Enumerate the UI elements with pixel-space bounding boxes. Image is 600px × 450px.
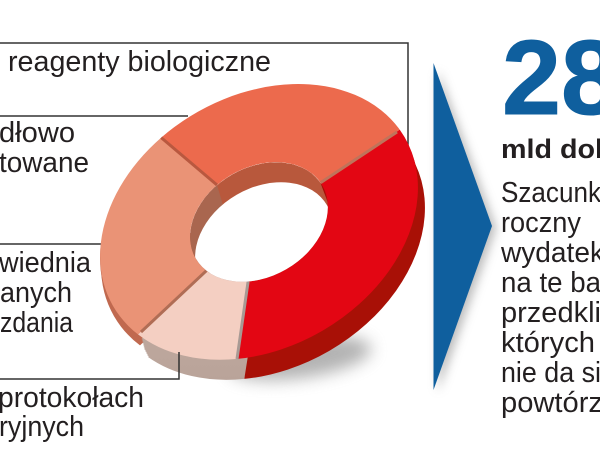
slice: orange [161,84,400,185]
label: third category: anych [0,277,72,309]
donut extruded side [100,132,425,380]
slice: peach [100,138,217,334]
arrow shadow [438,70,496,392]
label: fourth category: protokołach [0,382,144,414]
slice: pale pink [138,271,248,360]
label: fourth category: ryjnych [0,411,84,443]
slice: red largest [237,130,418,359]
unit label: mld dol [501,134,600,164]
description text: których [501,327,595,359]
connector lines: leaders behind the donut [0,43,408,244]
arrow pointing right [434,63,496,392]
description text: przedkli [501,297,600,329]
label: second category: dłowo [0,117,75,149]
label: third category [0,247,91,339]
donut hole with inner wall [190,162,328,282]
description text [500,177,600,419]
label: fourth category [0,382,144,443]
slice separators [141,132,397,359]
description text: roczny [501,207,582,239]
label: reagenty biologiczne: reagenty biologiczne [8,46,271,78]
label: second category: towane [0,147,89,179]
donut shadow [226,328,374,388]
label: third category: zdania [0,307,73,339]
label: third category: wiednia [0,247,91,279]
connector line over pale slice [0,352,179,379]
donut chart [100,84,425,388]
label: second category [0,117,89,179]
description text: powtórz [501,387,600,419]
